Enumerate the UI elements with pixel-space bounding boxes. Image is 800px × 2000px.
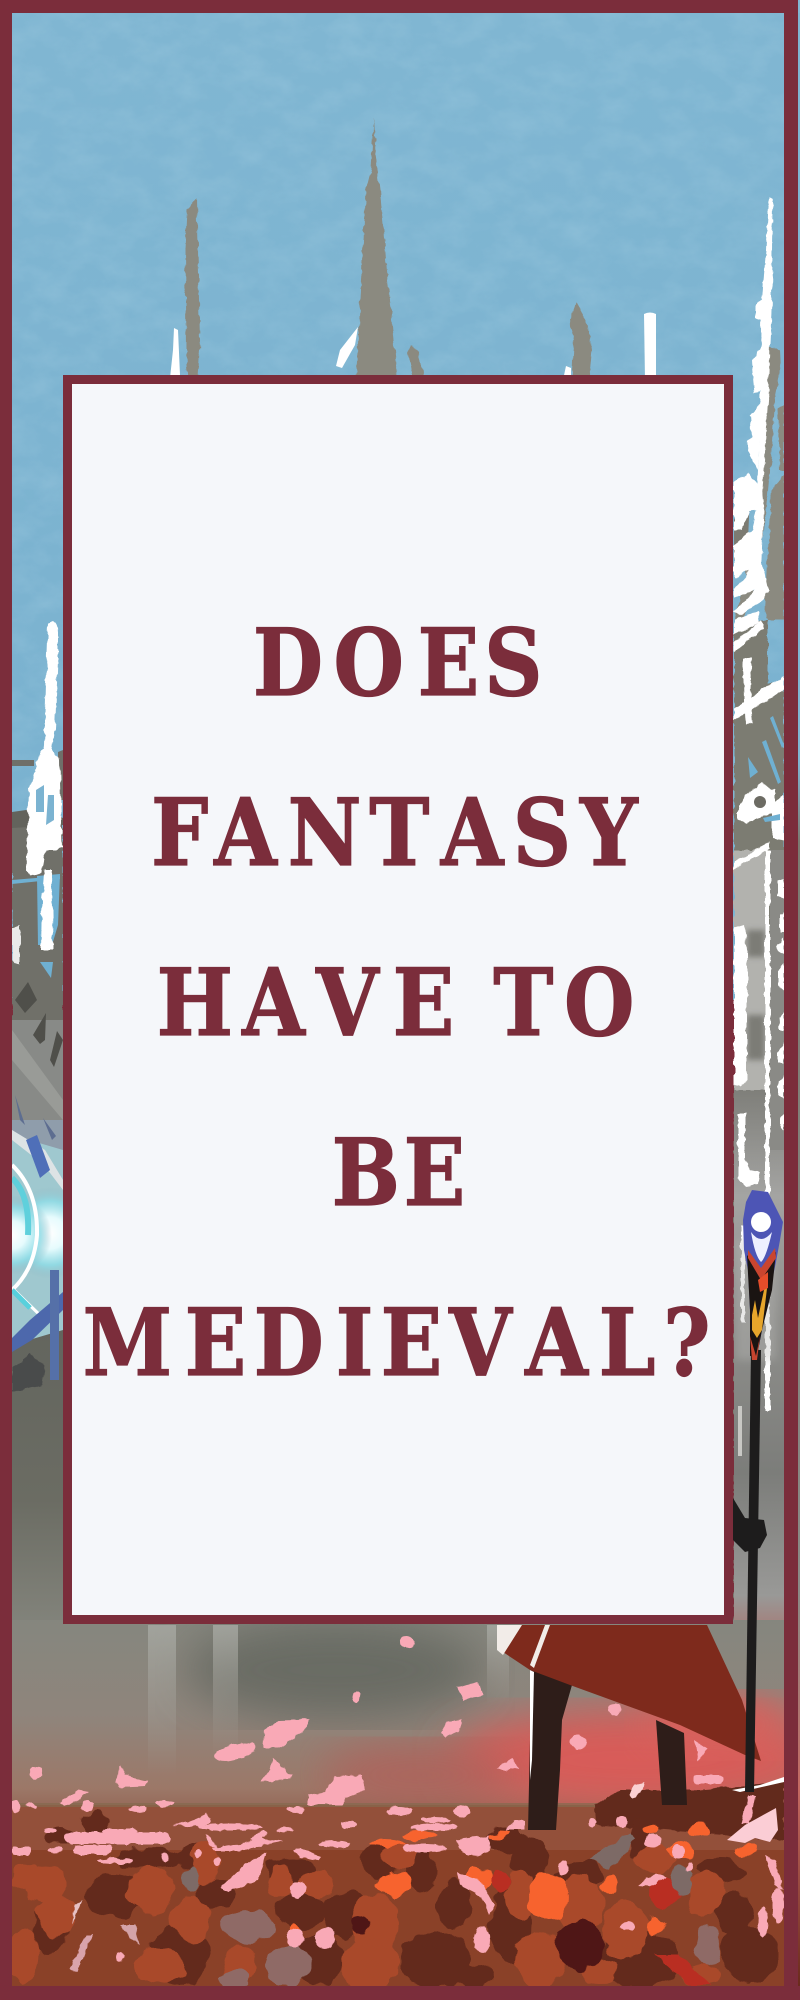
ground — [12, 1803, 784, 1987]
ground foliage — [11, 1637, 784, 1993]
title text: FANTASY — [151, 778, 639, 887]
title text: DOES — [253, 608, 543, 717]
left white stroke — [12, 622, 62, 965]
hand — [733, 1498, 767, 1552]
red accents — [352, 1870, 715, 1986]
magic staff — [733, 1190, 783, 1792]
mauve leaves — [182, 1833, 722, 1988]
bright orange leaves — [288, 1822, 755, 1947]
right edge sliver of the picture — [798, 13, 800, 1986]
mound behind right leg — [595, 1782, 784, 1840]
title text — [83, 608, 711, 1397]
sky — [0, 0, 800, 1000]
right white strokes — [734, 198, 784, 1410]
white strokes at top — [170, 312, 656, 380]
misty forest and red glow — [12, 1620, 800, 1830]
staff head — [743, 1190, 783, 1360]
foliage leaves — [11, 1813, 778, 1993]
dark leaves — [32, 1813, 778, 1988]
left glow orb — [0, 1130, 96, 1380]
right side scenery — [734, 198, 784, 1640]
title panel — [68, 380, 728, 1620]
left side scenery — [0, 622, 96, 1640]
pink petals — [11, 1637, 784, 1972]
title text: MEDIEVAL? — [83, 1288, 711, 1397]
title text: HAVE TO — [157, 948, 634, 1057]
spires behind panel — [185, 118, 592, 380]
orange-brown leaves — [11, 1841, 723, 1993]
large pale petal — [727, 1808, 778, 1843]
title text: BE — [332, 1118, 465, 1227]
figure: cloak and legs — [497, 1625, 761, 1830]
